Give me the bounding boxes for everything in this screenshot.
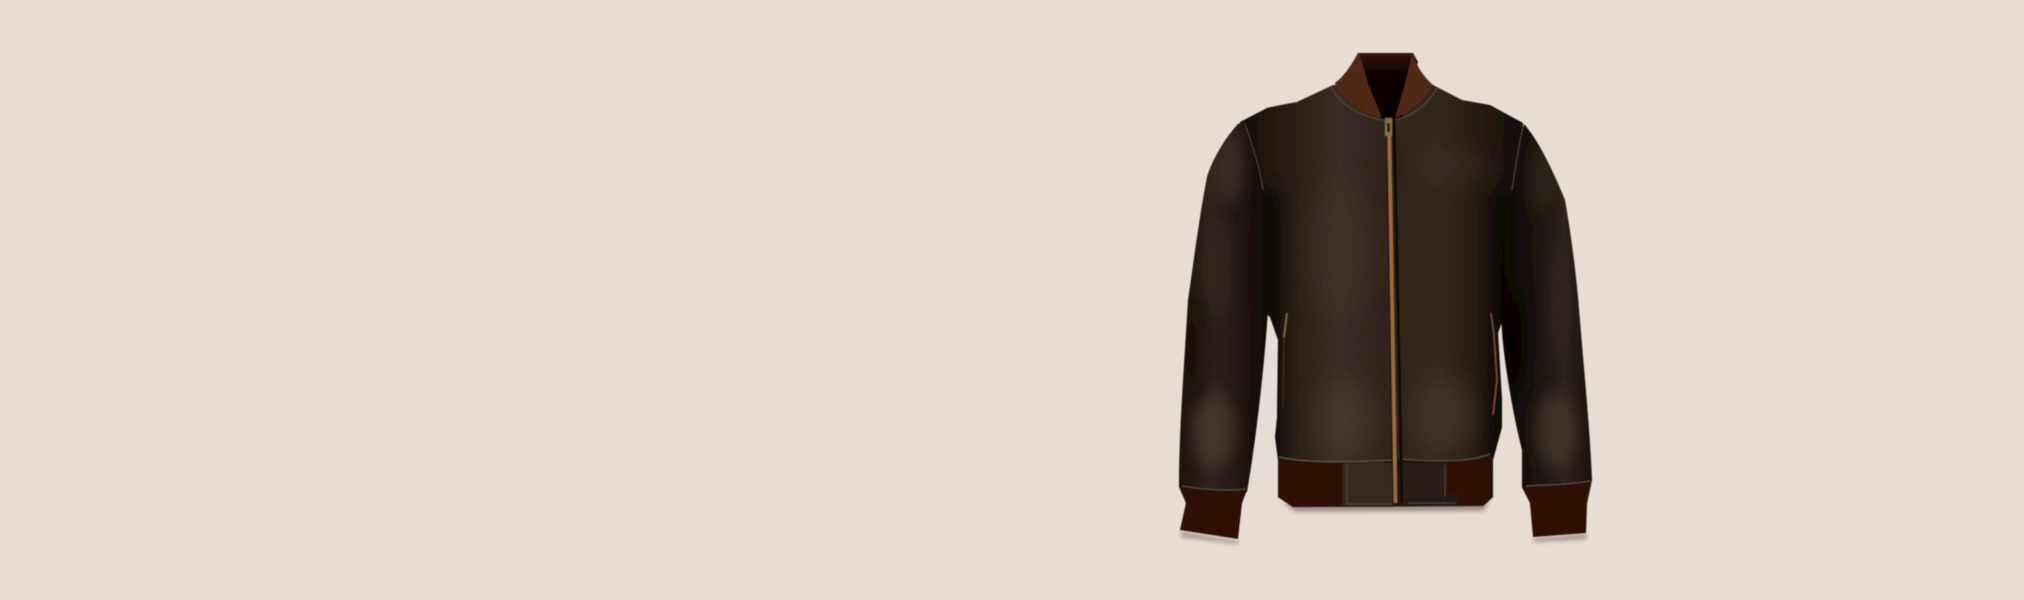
zipper	[1385, 118, 1402, 503]
left cuff	[1179, 486, 1247, 539]
left sleeve	[1179, 122, 1269, 503]
jacket	[1179, 53, 1592, 544]
hem leather tabs	[1343, 463, 1393, 507]
jacket body	[1240, 85, 1523, 510]
side pockets	[1283, 313, 1497, 415]
hem ribbing	[1278, 454, 1493, 507]
ground shadows	[1180, 498, 1587, 544]
banner background with jacket illustration	[1178, 52, 1593, 546]
collar	[1331, 53, 1437, 120]
right cuff	[1522, 480, 1592, 537]
right sleeve	[1501, 124, 1592, 503]
